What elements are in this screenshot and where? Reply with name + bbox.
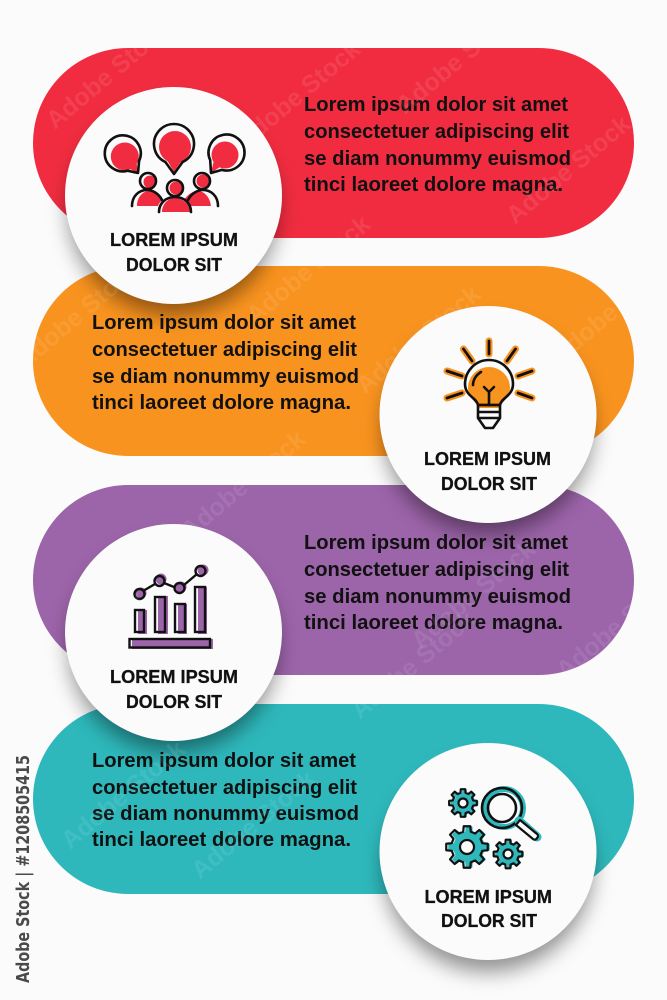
heading: orange circle label: LOREM IPSUM xyxy=(424,449,551,469)
watermark text: Adobe Stock xyxy=(351,280,486,400)
text block: red band: tinci laoreet dolore magna. xyxy=(304,174,563,196)
heading: red circle label: LOREM IPSUM xyxy=(110,230,238,250)
panel: purple band xyxy=(33,485,634,675)
watermark text: Adobe Stock xyxy=(186,765,321,885)
text block: purple band xyxy=(304,532,571,634)
watermark text: Adobe Stock xyxy=(501,110,636,230)
heading: teal circle label: LOREM IPSUM xyxy=(424,887,552,907)
heading: purple circle label: LOREM IPSUM xyxy=(110,667,238,687)
watermark text: Adobe Stock xyxy=(11,255,146,375)
watermark text: Adobe Stock xyxy=(176,425,311,545)
badge: red circle xyxy=(65,87,282,315)
text block: teal band: consectetuer adipiscing elit xyxy=(92,777,357,799)
text block: orange band: Lorem ipsum dolor sit amet xyxy=(92,312,356,334)
heading: orange circle label: DOLOR SIT xyxy=(441,474,537,494)
icon: bar chart with trend line xyxy=(130,564,213,649)
icon: light bulb xyxy=(447,341,532,428)
heading: purple circle label xyxy=(110,667,238,712)
text block: red band: Lorem ipsum dolor sit amet xyxy=(304,94,568,116)
heading: purple circle label: DOLOR SIT xyxy=(126,692,222,712)
text block: teal band: se diam nonummy euismod xyxy=(92,803,359,825)
watermark text: Adobe Stock xyxy=(241,210,376,330)
badge: orange circle xyxy=(380,306,596,534)
panel: orange band xyxy=(33,266,634,456)
badge: purple circle xyxy=(65,524,282,752)
text block: teal band: tinci laoreet dolore magna. xyxy=(92,829,351,851)
text block: orange band xyxy=(92,312,359,414)
heading: red circle label: DOLOR SIT xyxy=(126,255,222,275)
watermark text: Adobe Stock xyxy=(41,15,176,135)
text block: teal band: Lorem ipsum dolor sit amet xyxy=(92,750,356,772)
badge: teal circle xyxy=(380,743,596,972)
text block: orange band: tinci laoreet dolore magna. xyxy=(92,392,351,414)
text block: red band xyxy=(304,94,571,196)
watermark text: Adobe Stock xyxy=(56,735,191,855)
text block: red band: consectetuer adipiscing elit xyxy=(304,121,569,143)
watermark text: Adobe Stock xyxy=(391,0,526,120)
watermark text: Adobe Stock xyxy=(406,535,541,655)
watermark text: Adobe Stock xyxy=(16,585,151,705)
heading: teal circle label xyxy=(424,887,552,931)
icon: people with speech bubbles xyxy=(105,124,245,212)
text block: orange band: consectetuer adipiscing elit xyxy=(92,339,357,361)
heading: orange circle label xyxy=(424,449,551,494)
watermark text: Adobe Stock xyxy=(231,35,366,155)
heading: teal circle label: DOLOR SIT xyxy=(441,911,537,931)
heading: red circle label xyxy=(110,230,238,275)
icon: gears and magnifier xyxy=(446,788,538,868)
text block: purple band: Lorem ipsum dolor sit amet xyxy=(304,532,568,554)
text block: teal band xyxy=(92,750,359,851)
side credit text: Adobe Stock | #1208505415 xyxy=(13,755,34,983)
text block: purple band: se diam nonummy euismod xyxy=(304,586,571,608)
text block: red band: se diam nonummy euismod xyxy=(304,148,571,170)
text block: purple band: consectetuer adipiscing elit xyxy=(304,559,569,581)
panel: teal band xyxy=(33,704,634,894)
panel: red band xyxy=(33,48,634,238)
text block: purple band: tinci laoreet dolore magna. xyxy=(304,612,563,634)
text block: orange band: se diam nonummy euismod xyxy=(92,366,359,388)
watermark text: Adobe Stock xyxy=(346,605,481,725)
